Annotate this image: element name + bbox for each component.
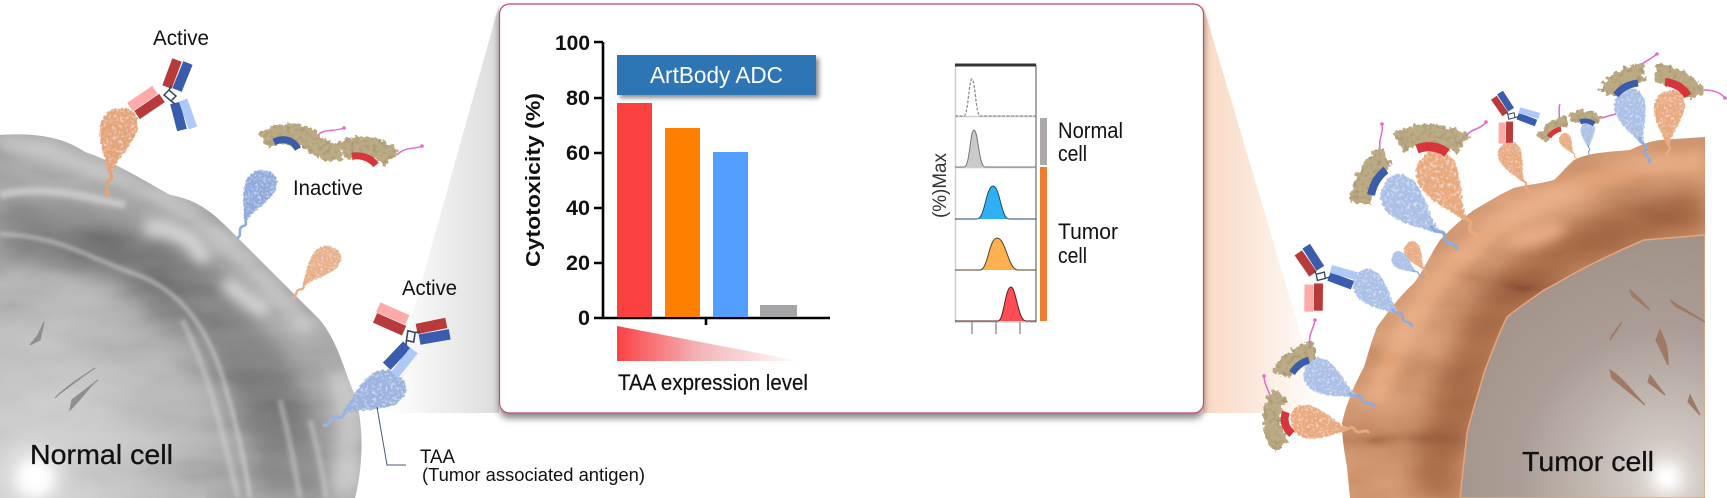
inactive masked ADC (264, 126, 424, 165)
bottom cluster (1262, 318, 1382, 449)
normal cell illustration (0, 130, 370, 498)
histogram: tumor red (955, 287, 1036, 321)
antibody bottom, normal cell (358, 281, 455, 376)
blue receptor with antibody (1346, 264, 1423, 338)
bar chart: cytotoxicity (523, 32, 830, 395)
label: tumor cell: Tumor (1058, 219, 1118, 244)
proteins and ADCs on tumor cell (1262, 52, 1727, 449)
bar: orange (665, 128, 700, 317)
small receptors (1400, 239, 1436, 282)
central panel (500, 4, 1204, 413)
TAA gradient triangle (617, 326, 800, 361)
tumor cell bar (1040, 167, 1047, 321)
blue receptor with antibody (314, 362, 412, 441)
label: Normal cell: Normal cell (30, 439, 173, 470)
axes (594, 42, 830, 325)
blue receptor (223, 164, 281, 244)
label: tumor cell (1058, 219, 1118, 268)
label: Inactive: Inactive (293, 177, 363, 200)
background wedge: tumor cell zoom (1203, 5, 1324, 413)
bar: gray (760, 305, 797, 317)
y tick labels (555, 32, 590, 330)
label: Tumor associated antigen: (Tumor associated antigen) (422, 465, 645, 485)
orange receptor with antibody (87, 104, 140, 200)
histogram: tumor orange (955, 238, 1036, 270)
label: tumor cell: cell (1058, 243, 1087, 268)
y tick labels: 20 (566, 252, 590, 275)
y tick labels: 100 (555, 32, 590, 55)
orange receptor (282, 239, 346, 307)
central large cluster (1360, 120, 1497, 264)
orange receptor with antibody (1493, 138, 1541, 200)
antibody top, normal cell (130, 60, 193, 130)
x ticks (972, 322, 1020, 334)
label: normal cell: cell (1058, 141, 1087, 166)
y axis title: Cytotoxicity (%) (523, 93, 545, 267)
y tick labels: 80 (566, 87, 590, 110)
proteins on normal cell (87, 104, 412, 441)
label: Active bottom: Active (402, 277, 457, 300)
tumor cell illustration (1340, 130, 1710, 498)
y axis label: (%)Max (930, 153, 951, 218)
label: normal cell (1058, 118, 1123, 166)
label: Tumor cell: Tumor cell (1522, 446, 1654, 477)
histogram: normal unstained (955, 79, 1036, 116)
top middle small cluster (1542, 104, 1616, 163)
y tick labels: 40 (566, 197, 590, 220)
bar: blue (713, 152, 748, 317)
y tick labels: 60 (566, 142, 590, 165)
label: TAA: TAA (420, 447, 455, 468)
label: Active top: Active (153, 27, 209, 50)
y tick labels: 0 (578, 307, 590, 330)
frame (955, 65, 1036, 322)
bar: red (617, 103, 652, 317)
antibody, lower (1274, 241, 1358, 324)
leader line to TAA (377, 407, 406, 465)
histogram: normal gray (955, 130, 1036, 167)
label: TAA expression level: TAA expression level (618, 370, 808, 395)
antibody, top (1475, 89, 1540, 153)
flow cytometry histograms (930, 64, 1123, 334)
ArtBody ADC label box: ArtBody ADC (650, 62, 783, 88)
label: normal cell: Normal (1058, 118, 1123, 143)
normal cell bar (1040, 118, 1047, 165)
ArtBody ADC label box (617, 55, 816, 95)
histogram: tumor blue (955, 186, 1036, 219)
top right cluster (1608, 52, 1727, 168)
background wedge: normal cell zoom (385, 5, 499, 413)
